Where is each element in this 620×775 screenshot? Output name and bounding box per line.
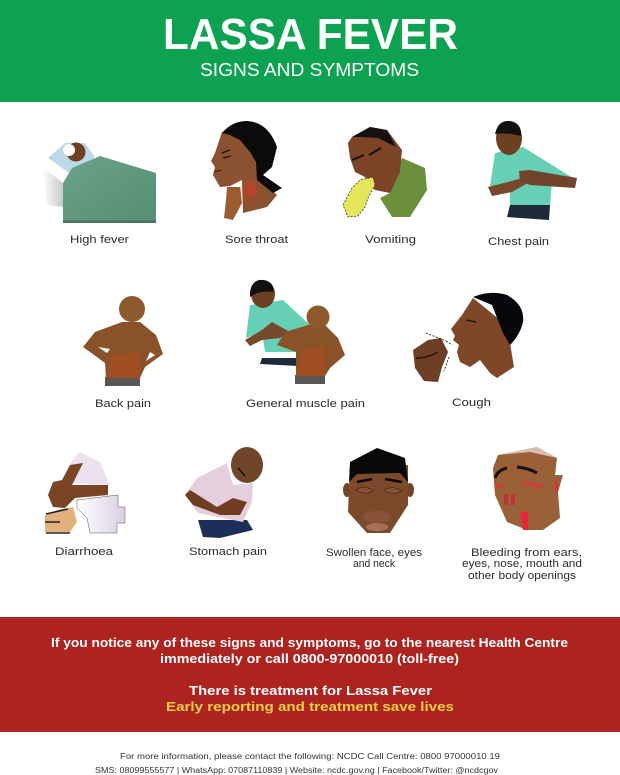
label: swollen face: Swollen face, eyes [326,547,423,559]
label: diarrhoea: Diarrhoea [55,546,114,558]
footer contact info: SMS: 08099555577 | WhatsApp: 07087110839 | Website: ncdc.gov.ng | Facebook/Twitter: @ncdcgov [95,766,498,775]
subtitle: SIGNS AND SYMPTOMS [200,60,419,80]
icon: cough [413,293,523,382]
label: chest pain: Chest pain [488,236,549,248]
icon: vomiting [343,127,427,217]
icon: stomach pain [185,447,263,538]
label: swollen face [326,547,423,570]
label: sore throat: Sore throat [225,234,288,246]
label: back pain: Back pain [95,398,151,410]
label: bleeding: Bleeding from ears, [471,547,582,559]
call to action text: immediately or call 0800-97000010 (toll-free) [160,651,459,666]
label: general muscle pain: General muscle pain [246,398,365,410]
icon: high fever [43,142,156,223]
label: cough: Cough [452,397,491,409]
label: vomiting: Vomiting [365,234,416,246]
label: swollen face: and neck [353,558,395,570]
icon: swollen face [343,448,414,533]
treatment message: There is treatment for Lassa Fever [189,683,432,698]
icon: diarrhoea [45,452,125,533]
call to action text: If you notice any of these signs and symptoms, go to the nearest Health Centre [51,635,568,650]
label: stomach pain: Stomach pain [189,546,267,558]
label: high fever: High fever [70,234,129,246]
icon: chest pain [488,121,577,220]
label: bleeding [462,547,582,582]
label: bleeding: eyes, nose, mouth and [462,558,582,570]
label: bleeding: other body openings [468,570,577,582]
icon: general muscle pain [245,280,345,384]
header band [0,0,620,102]
icon: sore throat [211,121,282,220]
title: LASSA FEVER [163,10,458,59]
early reporting message: Early reporting and treatment save lives [166,699,454,714]
footer contact info [95,752,501,775]
icon: back pain [83,296,163,386]
footer contact info: For more information, please contact the following: NCDC Call Centre: 0800 97000010 19 [120,752,501,761]
call to action band [0,617,620,732]
icon: bleeding [493,447,563,530]
